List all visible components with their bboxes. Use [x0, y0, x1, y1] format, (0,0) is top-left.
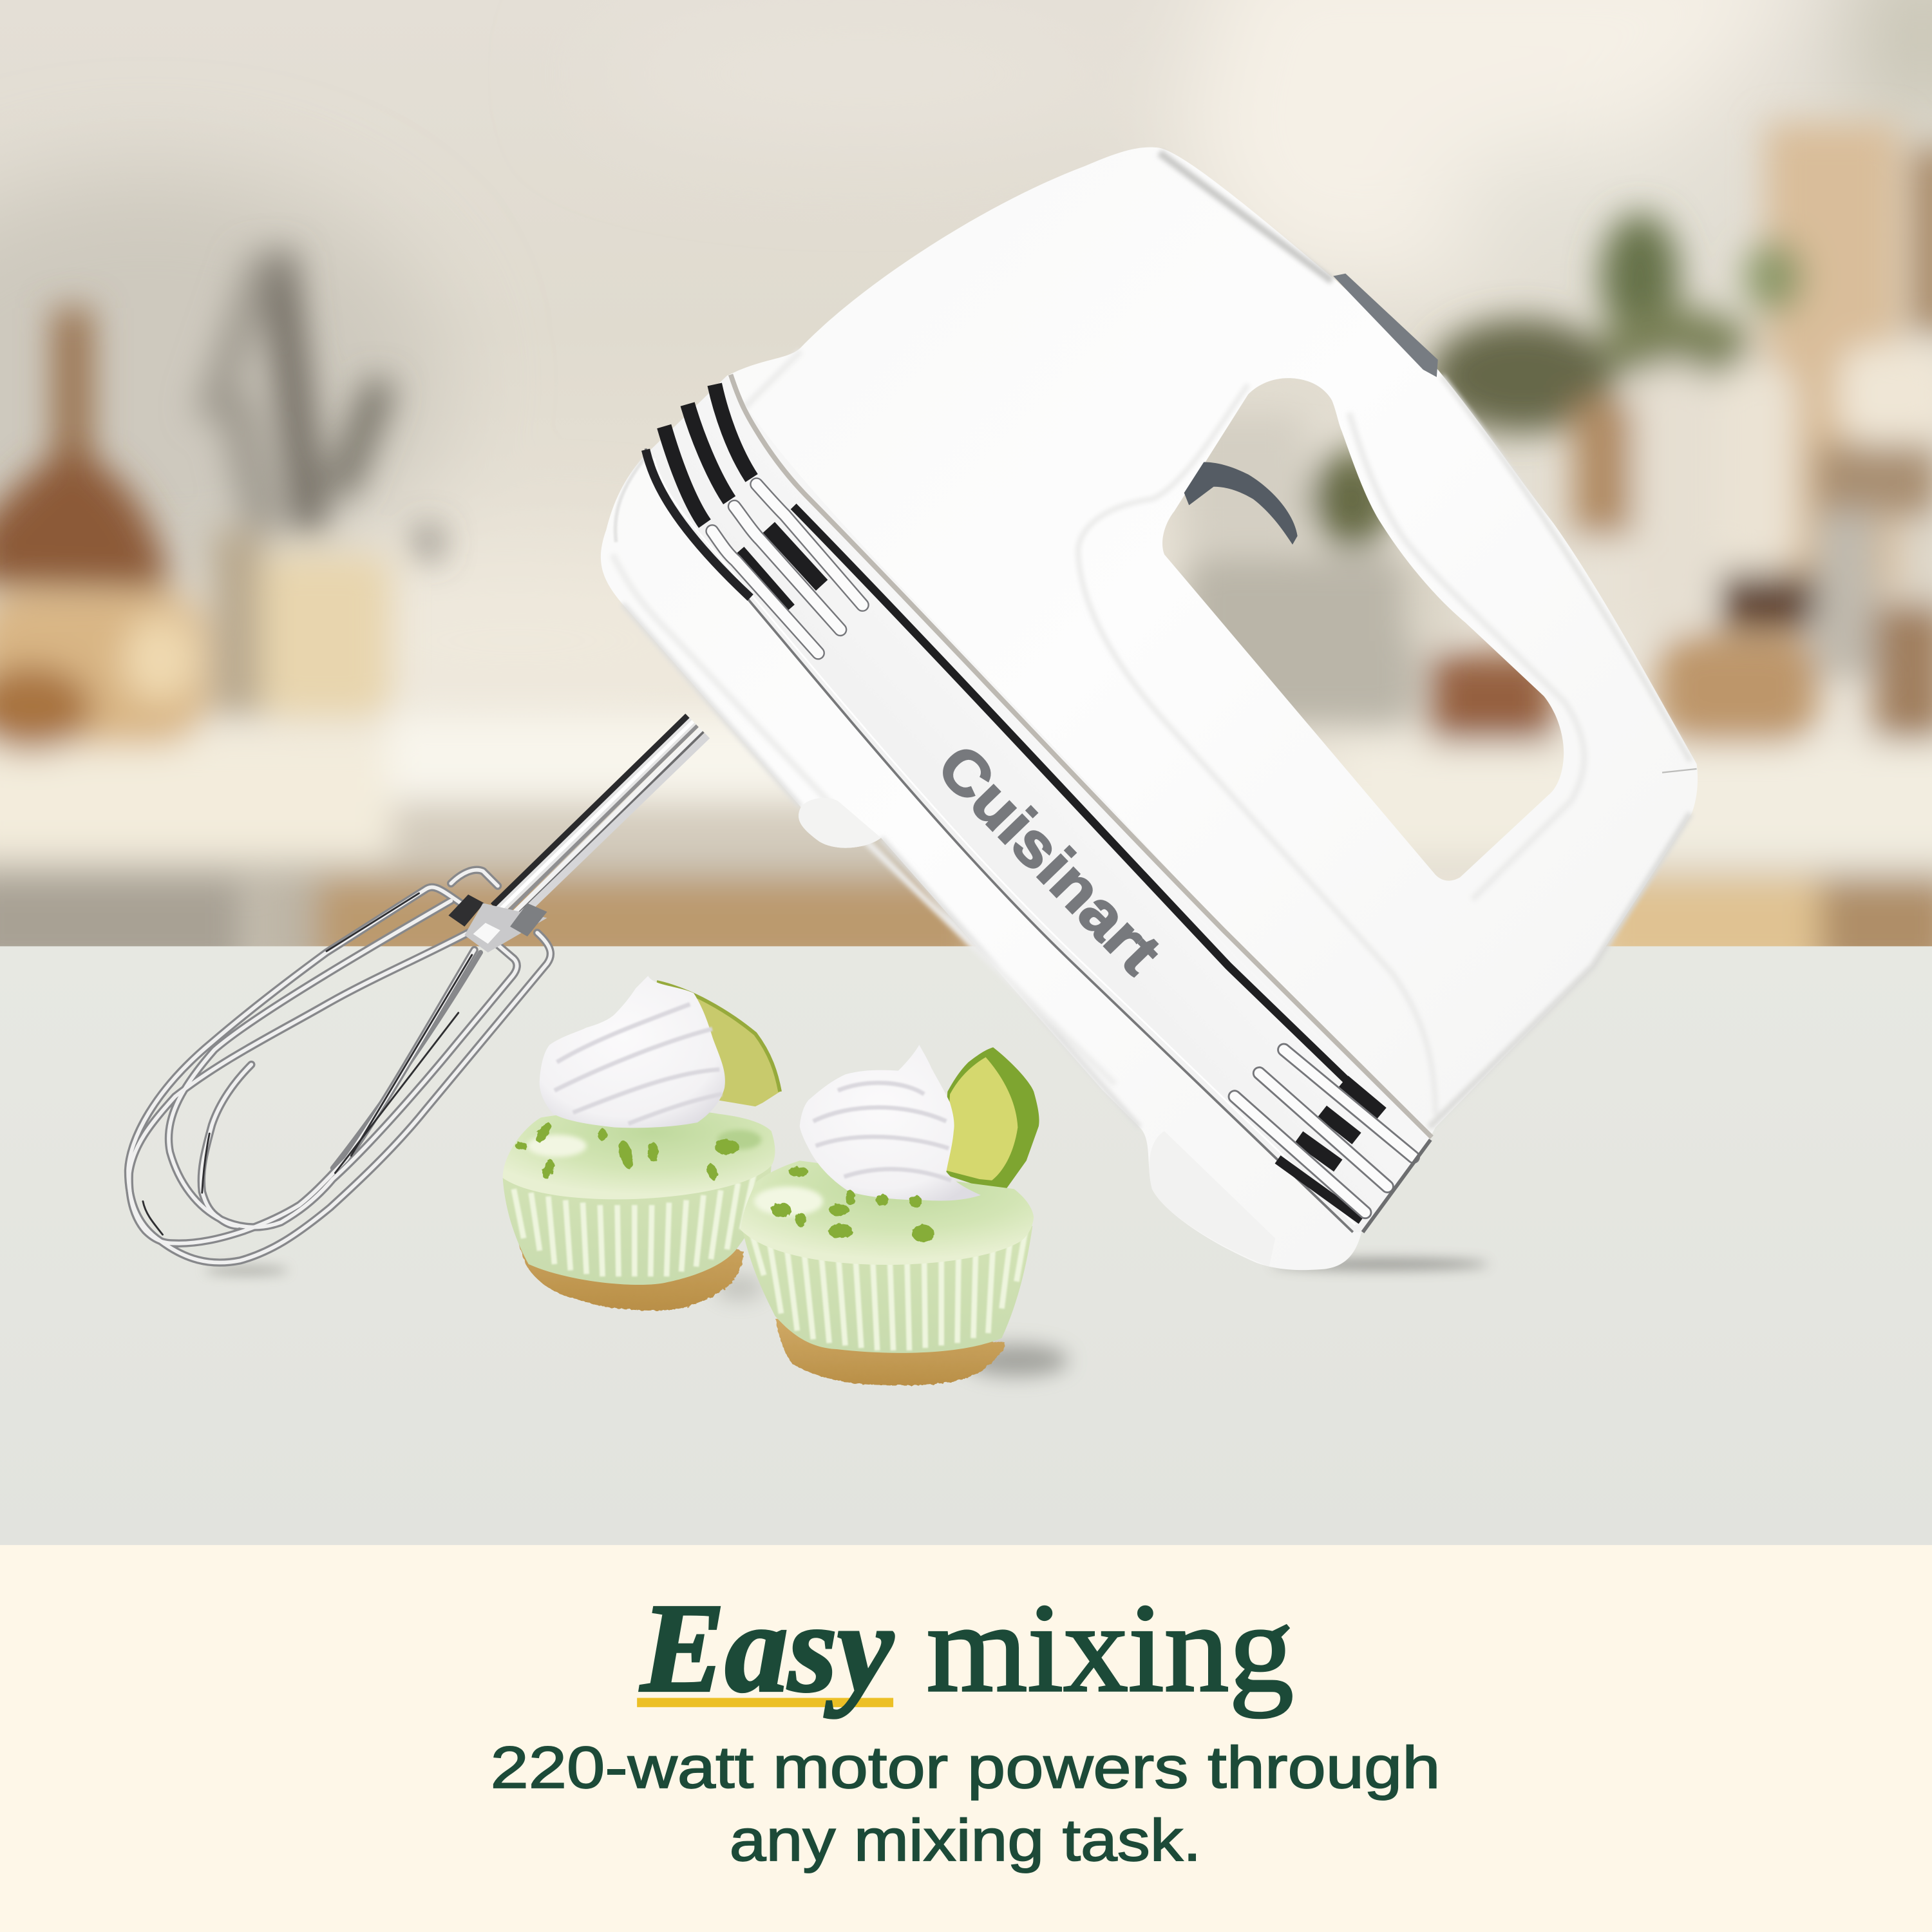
- subheading: 220-watt motor powers through: [490, 1735, 1441, 1801]
- cast shadows: [205, 1258, 1488, 1376]
- heading: mixing: [927, 1577, 1294, 1718]
- heading: Easy: [639, 1577, 895, 1718]
- heading underline: [637, 1698, 893, 1707]
- dark reflections: [1343, 1082, 1381, 1114]
- handle seam: [1662, 769, 1697, 773]
- whisk collar: [448, 895, 547, 952]
- blurred kitchen background: [0, 0, 1932, 976]
- mixer body: [601, 147, 1698, 1270]
- icon: hand mixer: [601, 147, 1698, 1270]
- whisk wires: [128, 870, 551, 1263]
- icon: right key lime cupcake: [741, 1045, 1039, 1385]
- glaze dome: [741, 1160, 1034, 1265]
- bottom caption panel: [0, 1545, 1932, 1932]
- ridges: [514, 1173, 754, 1276]
- right chrome grooves: [1235, 1050, 1430, 1232]
- whisk dark reflections: [143, 893, 472, 1235]
- lime slice: [657, 982, 780, 1106]
- whisk shaft: [493, 716, 707, 919]
- raised ribs: [1235, 1050, 1414, 1213]
- whipped cream: [800, 1045, 981, 1201]
- paper case: [503, 1166, 772, 1285]
- lime wedge: [944, 1047, 1039, 1195]
- dark reflections: [715, 384, 752, 478]
- band top edge lines: [646, 375, 1432, 1232]
- chrome band: [645, 376, 1429, 1232]
- icon: beater trigger: [1184, 462, 1298, 545]
- lower body lip: [615, 459, 645, 542]
- lime zest: [772, 1167, 934, 1242]
- handle edge shading: [612, 153, 1690, 1128]
- left chrome grooves: [646, 384, 862, 653]
- icon: whisk beater: [128, 716, 707, 1263]
- icon: left key lime cupcake: [503, 976, 780, 1311]
- paper case: [743, 1226, 1032, 1353]
- brand logo: Cuisinart: [924, 732, 1174, 987]
- subheading: any mixing task.: [730, 1808, 1201, 1873]
- ridges: [752, 1232, 1025, 1350]
- whipped cream: [540, 976, 725, 1128]
- raised ribs: [712, 484, 862, 653]
- lime zest: [515, 1121, 739, 1182]
- heading: [639, 1577, 1294, 1718]
- left shelf objects: [0, 735, 394, 859]
- crust: [516, 1220, 744, 1311]
- glaze dome: [503, 1110, 775, 1199]
- speed control strip: [1333, 274, 1438, 377]
- beater release bump: [799, 798, 881, 848]
- crust: [775, 1318, 1005, 1385]
- right shelf objects: [1331, 746, 1932, 862]
- counter surface: [0, 946, 1932, 1545]
- subheading: [490, 1735, 1441, 1873]
- lower nub: [1149, 1131, 1275, 1267]
